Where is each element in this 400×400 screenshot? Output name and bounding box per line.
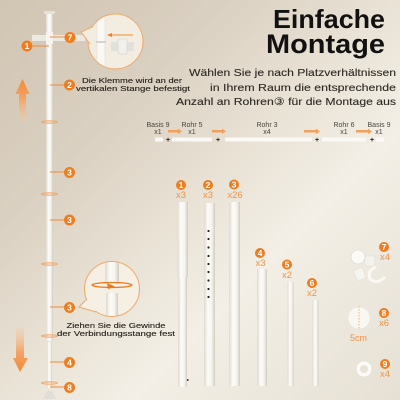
title: Einfache: [273, 4, 385, 34]
part 6 rod: x2: [307, 288, 317, 299]
part 2 rod: x3: [203, 190, 213, 201]
pole callout badges: 7: [68, 32, 73, 42]
pole callout badges: 8: [67, 382, 72, 392]
assembly order diagram: x1: [375, 129, 383, 136]
callout: clamp detail: [80, 14, 144, 70]
text: thread note: der Verbindungsstange fest: [57, 329, 175, 338]
assembly order diagram: [147, 122, 391, 144]
part 7 clamps and hooks: 7: [382, 242, 387, 252]
assembly order diagram: Rohr 6: [333, 122, 355, 129]
part 1 rod: 1: [179, 180, 184, 190]
part 8 disk 5cm: 8: [382, 308, 387, 318]
assembly order diagram: Rohr 5: [181, 122, 203, 129]
assembly order diagram: Basis 9: [147, 122, 170, 129]
assembly order diagram: +: [315, 137, 319, 144]
assembly order diagram: x4: [263, 129, 271, 136]
text: thread note: [57, 321, 175, 338]
title: Montage: [266, 29, 385, 59]
description text: [176, 67, 396, 108]
assembly order diagram: +: [216, 137, 220, 144]
assembly order diagram: +: [370, 137, 374, 144]
part 4 rod: x3: [255, 258, 266, 269]
text: clamp note: vertikalen Stange befestigt: [76, 84, 190, 93]
part 2 rod: [203, 180, 215, 386]
part 2 rod: 2: [206, 180, 211, 190]
part 8 disk 5cm: 5cm: [350, 333, 367, 343]
part 9 ring: 9: [383, 359, 388, 369]
description text: Wählen Sie je nach Platzverhältnissen: [189, 67, 396, 79]
part 8 disk 5cm: x6: [379, 318, 389, 329]
assembly order diagram: x1: [340, 129, 348, 136]
pole callout badges: 3: [67, 215, 72, 225]
part 7 clamps and hooks: x4: [380, 252, 390, 263]
part 4 rod: 4: [258, 248, 263, 258]
pole callout badges: [22, 32, 76, 393]
assembled pole: [32, 11, 85, 399]
description text: in Ihrem Raum die entsprechende: [210, 82, 396, 94]
description text: Anzahl an Rohren③ für die Montage aus: [176, 96, 396, 108]
text: clamp note: [76, 76, 190, 93]
assembly order diagram: x1: [154, 129, 162, 136]
part 9 ring: x4: [380, 369, 390, 380]
assembly order diagram: Basis 9: [368, 122, 391, 129]
title: [266, 4, 385, 59]
text: thread note: Ziehen Sie die Gewinde: [66, 321, 166, 330]
part 4 rod: [255, 248, 267, 386]
part 6 rod: 6: [310, 278, 315, 288]
pole callout badges: 3: [67, 168, 72, 178]
part 1 rod: x3: [176, 190, 186, 201]
part 8 disk 5cm: [348, 306, 389, 343]
part 5 rod: 5: [285, 260, 290, 270]
callout: thread tightening: [79, 260, 140, 318]
part 6 rod: [307, 278, 318, 386]
icon: up arrow: [16, 79, 30, 122]
text: clamp note: Die Klemme wird an der: [82, 76, 183, 85]
part 7 clamps and hooks: [351, 242, 390, 282]
part 5 rod: x2: [282, 270, 292, 281]
assembly order diagram: +: [166, 137, 170, 144]
part 3 rod: 3: [232, 180, 237, 190]
pole callout badges: 4: [67, 358, 72, 368]
assembly order diagram: x1: [188, 129, 196, 136]
part 3 rod: [227, 180, 243, 386]
pole callout badges: 1: [25, 41, 30, 51]
assembly order diagram: Rohr 3: [256, 122, 278, 129]
part 9 ring: [356, 359, 390, 380]
part 3 rod: x26: [227, 190, 243, 201]
part 5 rod: [282, 260, 294, 386]
icon: down arrow: [13, 328, 28, 372]
pole callout badges: 3: [67, 302, 72, 312]
part 1 rod: [176, 180, 188, 387]
pole callout badges: 2: [67, 80, 72, 90]
